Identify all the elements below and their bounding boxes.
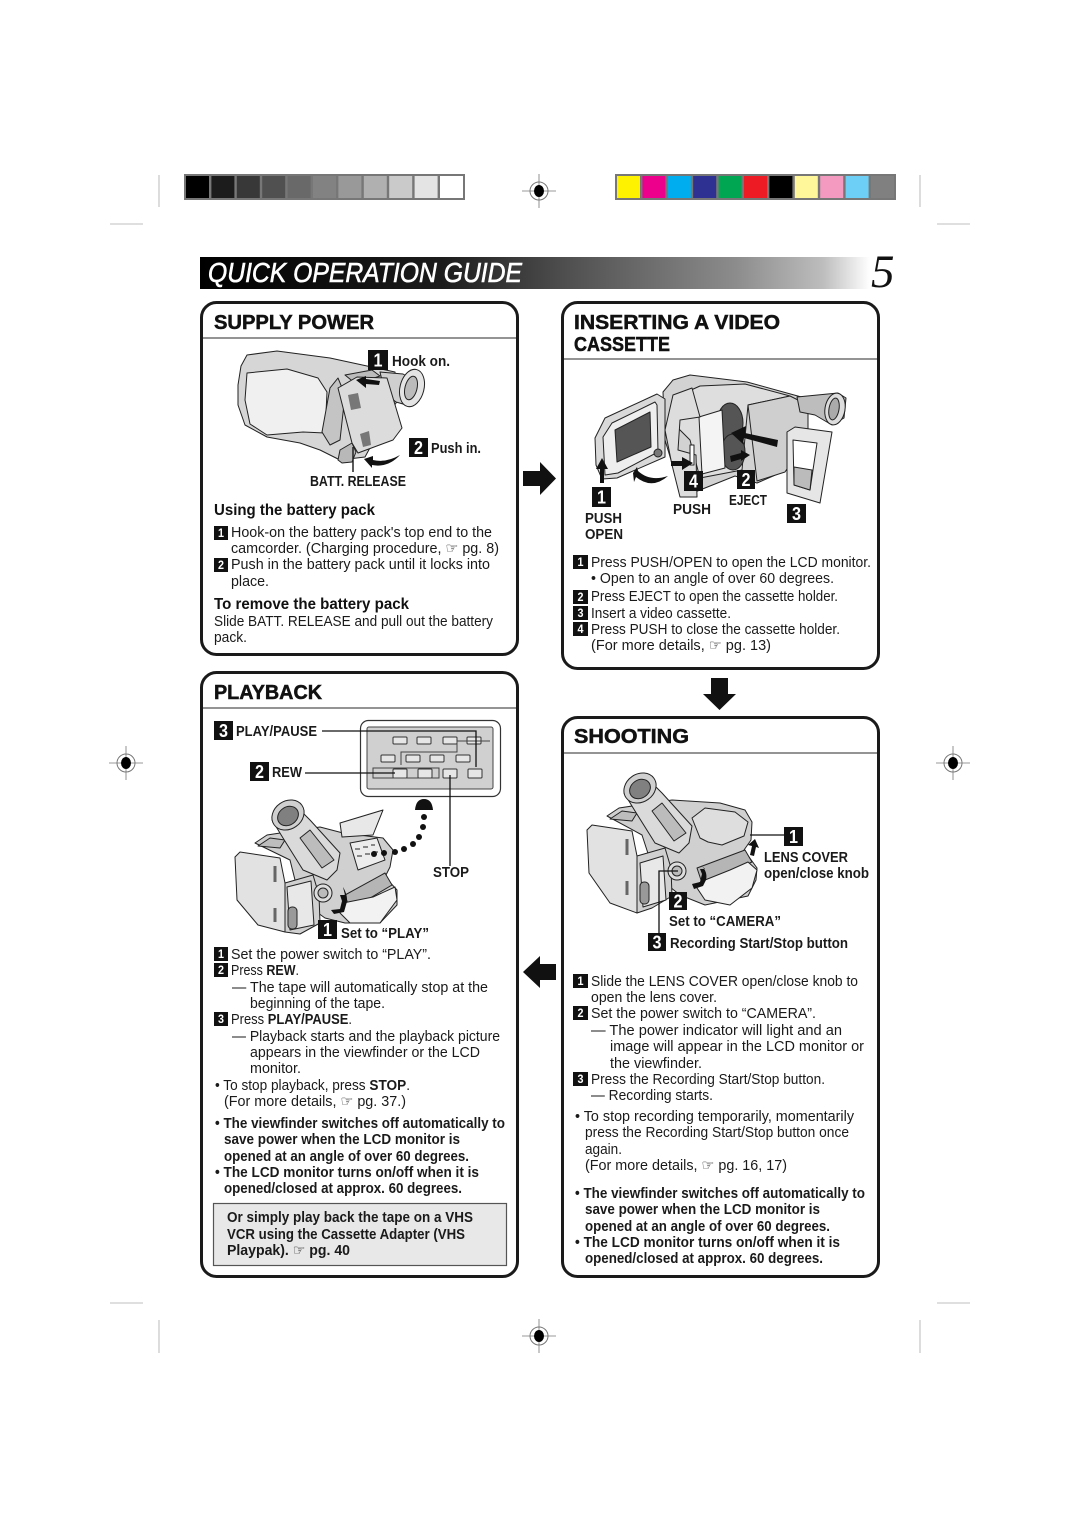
label: lens cover: open/close knob (764, 866, 869, 882)
heading: inserting a video cassette (574, 312, 780, 356)
label: play pause: PLAY/PAUSE (236, 724, 317, 740)
steps: inserting cassette: Press PUSH to close the cassette holder. (591, 622, 840, 638)
badge 1 push open (592, 487, 611, 508)
steps: inserting cassette: Press PUSH/OPEN to open the LCD monitor. (591, 555, 871, 571)
illustration: camcorder with battery pack (238, 351, 428, 472)
steps: inserting cassette: Press EJECT to open the cassette holder. (591, 589, 838, 605)
text: remove instructions (214, 614, 494, 646)
colour calibration bar (615, 174, 896, 200)
badge 2 rew: 2 (255, 762, 264, 782)
heading: inserting a video cassette: INSERTING A VIDEO (574, 312, 780, 334)
registration mark left (109, 746, 143, 780)
note: viewfinder and LCD: opened at an angle of over 60 degrees. (224, 1149, 469, 1165)
steps: playback: Press PLAY/PAUSE. (231, 1012, 352, 1028)
steps: shooting: open the lens cover. (591, 990, 717, 1006)
callout: cassette adapter: Or simply play back the tape on a VHS (227, 1210, 473, 1226)
badge 2 push in (409, 438, 428, 458)
steps: playback: 3 (218, 1012, 224, 1026)
label: push open: PUSH (585, 511, 622, 527)
steps: using the battery pack: Hook-on the battery pack's top end to the (231, 525, 492, 541)
leader line: play pause (322, 731, 476, 767)
badge 2 eject (737, 470, 755, 490)
label: set to play: Set to “PLAY” (341, 926, 429, 942)
badge 3 cassette: 3 (792, 504, 801, 524)
page number: 5 (871, 246, 894, 298)
arrow: down (703, 678, 736, 710)
steps: playback: Set the power switch to “PLAY”. (231, 947, 431, 963)
note: viewfinder and LCD: • The LCD monitor turns on/off when it is (575, 1235, 840, 1251)
steps: shooting: — Recording starts. (591, 1088, 713, 1104)
badge 2 camera (669, 892, 687, 912)
note: viewfinder and LCD: save power when the LCD monitor is (224, 1132, 460, 1148)
illustration: camcorder shooting position (587, 767, 759, 913)
callout: cassette adapter: Playpak). ☞ pg. 40 (227, 1243, 350, 1259)
steps: playback (214, 947, 500, 1110)
steps: shooting: the viewfinder. (610, 1056, 702, 1072)
greyscale calibration bar (184, 174, 465, 200)
registration mark right (936, 746, 970, 780)
steps: playback: 2 (218, 963, 224, 977)
badge 1 set to play (318, 920, 337, 940)
panel: shooting (562, 718, 878, 1276)
note: viewfinder and LCD: • The LCD monitor turns on/off when it is (215, 1165, 479, 1181)
badge 1 hook on: 1 (374, 350, 382, 370)
steps: inserting cassette: • Open to an angle of over 60 degrees. (591, 571, 834, 587)
steps: inserting cassette (573, 555, 871, 654)
badge 2 camera: 2 (674, 892, 682, 912)
badge 3 play pause (214, 721, 233, 741)
steps: playback: (For more details, ☞ pg. 37.) (224, 1094, 406, 1110)
title banner (200, 257, 870, 289)
badge 2 rew (250, 762, 269, 782)
note: viewfinder and LCD: save power when the LCD monitor is (585, 1202, 820, 1218)
subheading: using the battery pack: Using the battery pack (214, 502, 375, 519)
text: remove instructions: Slide BATT. RELEASE and pull out the battery (214, 614, 494, 630)
label: eject: EJECT (729, 493, 767, 509)
callout: cassette adapter (214, 1204, 506, 1266)
steps: shooting (573, 974, 864, 1104)
steps: using the battery pack: Push in the battery pack until it locks into (231, 557, 490, 573)
illustration: camcorder with open LCD and cassette (595, 375, 848, 503)
text: stop recording temporarily: (For more details, ☞ pg. 16, 17) (585, 1158, 787, 1174)
label: batt release: BATT. RELEASE (310, 474, 406, 490)
badge 1 set to play: 1 (323, 920, 332, 940)
steps: using the battery pack: place. (231, 574, 269, 590)
panel: playback (202, 672, 518, 1276)
badge 2 eject: 2 (742, 470, 750, 490)
steps: inserting cassette: Insert a video cassette. (591, 606, 731, 622)
panel: inserting a video cassette (562, 302, 878, 668)
steps: shooting: 1 (578, 974, 584, 988)
badge 1 push open: 1 (597, 488, 606, 508)
leader line: record button (659, 871, 678, 935)
note: viewfinder and LCD: • The viewfinder switches off automatically to (215, 1116, 505, 1132)
badge 1 hook on (368, 350, 388, 370)
heading: playback: PLAYBACK (214, 682, 323, 704)
label: hook on: Hook on. (392, 354, 450, 370)
label: push open: OPEN (585, 527, 623, 543)
steps: inserting cassette: 4 (578, 622, 584, 636)
steps: shooting: 2 (578, 1006, 584, 1020)
note: viewfinder and LCD (575, 1186, 865, 1267)
steps: shooting: — The power indicator will light and an (591, 1023, 842, 1039)
badge 4 push: 4 (689, 472, 698, 492)
steps: shooting: image will appear in the LCD monitor or (610, 1039, 864, 1055)
steps: shooting: Press the Recording Start/Stop button. (591, 1072, 825, 1088)
label: push in: Push in. (431, 441, 481, 457)
illustration: camcorder set to play (235, 794, 397, 934)
leader line: stop (449, 775, 451, 866)
label: push open (585, 511, 623, 543)
text: stop recording temporarily: again. (585, 1142, 622, 1158)
steps: playback: beginning of the tape. (250, 996, 385, 1012)
steps: using the battery pack: 2 (218, 558, 224, 572)
steps: shooting: Set the power switch to “CAMERA”. (591, 1006, 816, 1022)
badge 3 cassette (787, 504, 806, 524)
badge 1 lens cover (784, 827, 803, 847)
panel: supply power (202, 302, 518, 654)
steps: shooting: 3 (578, 1072, 584, 1086)
heading: shooting: SHOOTING (574, 726, 689, 748)
badge 1 lens cover: 1 (789, 827, 798, 847)
registration mark bottom (522, 1319, 556, 1353)
leader line: lens cover (750, 834, 784, 836)
leader line: rew (305, 772, 395, 774)
steps: playback: monitor. (250, 1061, 301, 1077)
steps: inserting cassette: (For more details, ☞ pg. 13) (591, 638, 771, 654)
text: stop recording temporarily (575, 1109, 855, 1174)
label: set to camera: Set to “CAMERA” (669, 914, 781, 930)
illustration: control panel close-up (360, 720, 500, 796)
callout: cassette adapter: VCR using the Cassette Adapter (VHS (227, 1227, 465, 1243)
label: rew: REW (272, 765, 302, 781)
steps: playback: — The tape will automatically stop at the (232, 980, 488, 996)
label: push: PUSH (673, 502, 711, 518)
badge 3 record (648, 932, 666, 952)
note: viewfinder and LCD (215, 1116, 505, 1197)
steps: inserting cassette: 2 (578, 590, 584, 604)
steps: inserting cassette: 1 (578, 555, 584, 569)
steps: playback: • To stop playback, press STOP. (215, 1078, 410, 1094)
subheading: to remove the battery pack: To remove the battery pack (214, 596, 409, 613)
badge 3 record: 3 (652, 932, 662, 952)
title banner: QUICK OPERATION GUIDE (208, 257, 522, 288)
label: lens cover: LENS COVER (764, 850, 848, 866)
text: stop recording temporarily: press the Recording Start/Stop button once (585, 1125, 849, 1141)
badge 3 play pause: 3 (219, 721, 228, 741)
steps: inserting cassette: 3 (578, 606, 584, 620)
heading: inserting a video cassette: CASSETTE (574, 334, 670, 356)
note: viewfinder and LCD: opened/closed at approx. 60 degrees. (224, 1181, 462, 1197)
steps: playback: Press REW. (231, 963, 299, 979)
label: stop: STOP (433, 865, 469, 881)
badge 2 push in: 2 (414, 438, 423, 458)
steps: playback: — Playback starts and the playback picture (232, 1029, 500, 1045)
text: stop recording temporarily: • To stop recording temporarily, momentarily (575, 1109, 855, 1125)
note: viewfinder and LCD: • The viewfinder switches off automatically to (575, 1186, 865, 1202)
registration mark top (522, 174, 556, 208)
steps: playback: 1 (218, 947, 224, 961)
text: remove instructions: pack. (214, 630, 247, 646)
dotted arrow to control panel (371, 799, 433, 857)
arrow: left (523, 956, 556, 988)
arrow: right (523, 462, 556, 495)
steps: shooting: Slide the LENS COVER open/close knob to (591, 974, 858, 990)
label: recording start stop: Recording Start/Stop button (670, 936, 848, 952)
heading: supply power: SUPPLY POWER (214, 312, 375, 334)
steps: using the battery pack: 1 (218, 526, 224, 540)
label: lens cover (764, 850, 869, 882)
steps: using the battery pack (214, 525, 499, 590)
steps: playback: appears in the viewfinder or the LCD (250, 1045, 480, 1061)
note: viewfinder and LCD: opened/closed at approx. 60 degrees. (585, 1251, 823, 1267)
steps: using the battery pack: camcorder. (Charging procedure, ☞ pg. 8) (231, 541, 499, 557)
note: viewfinder and LCD: opened at an angle of over 60 degrees. (585, 1219, 830, 1235)
badge 4 push (684, 471, 703, 492)
